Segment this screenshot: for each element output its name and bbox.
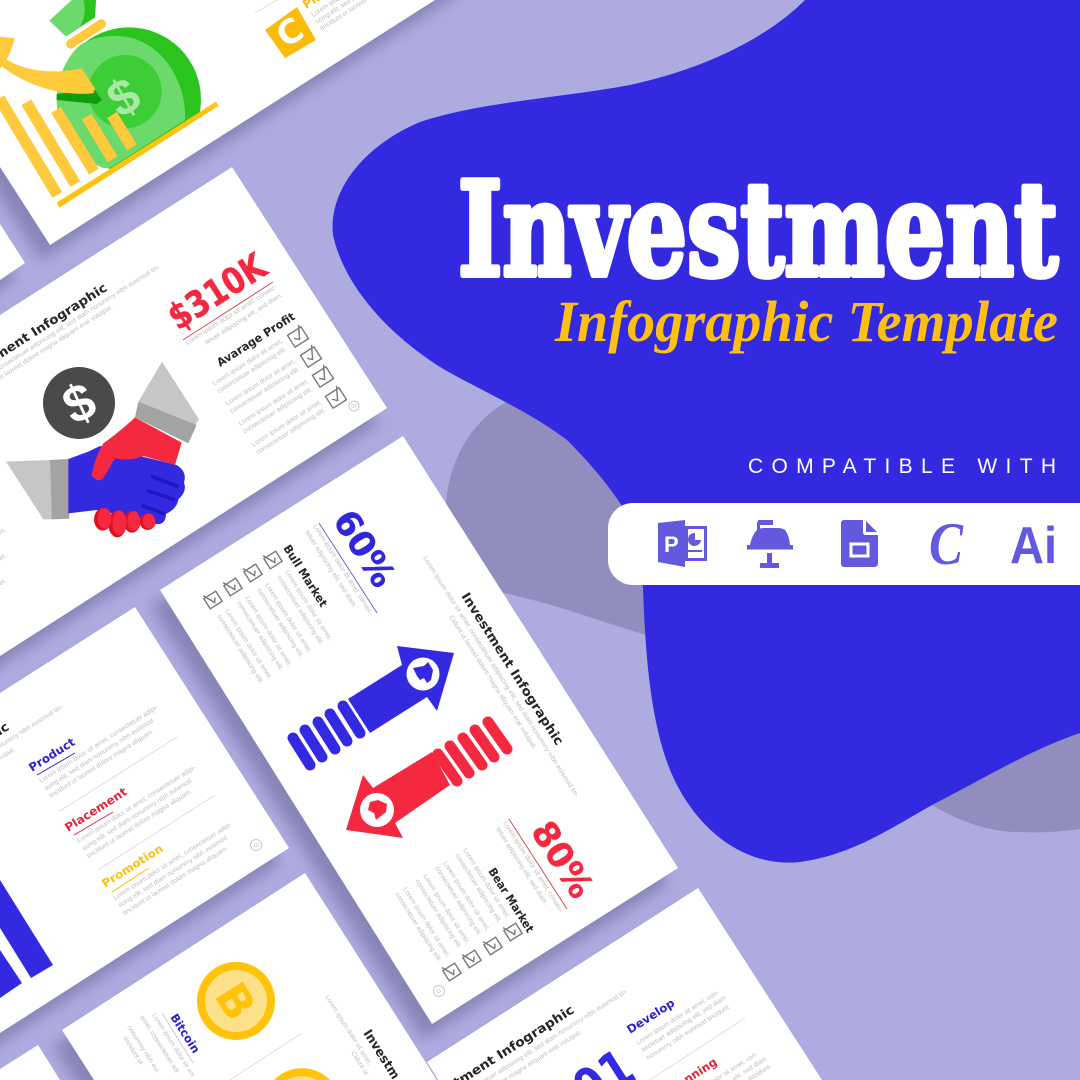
icon: C logo: C bbox=[269, 9, 311, 55]
checklist: bear: consectetuer adipiscing elit. bbox=[453, 852, 503, 925]
item: product: Product bbox=[26, 735, 78, 775]
blue blob bbox=[333, 0, 1080, 863]
arrow: bear down bbox=[346, 722, 507, 838]
panel: small bottom left slide bbox=[0, 1045, 60, 1080]
item: develop bbox=[624, 989, 732, 1062]
panel: small left slide bbox=[0, 224, 25, 280]
item: placement: Placement bbox=[62, 784, 130, 835]
text block: intro: Lorem ipsum dolor sit amet, bbox=[323, 994, 373, 1067]
panel: marketing mix slide bbox=[0, 607, 289, 1033]
text block: bitcoin copy bbox=[121, 1012, 196, 1079]
label: average profit: Avarage Profit bbox=[214, 309, 298, 370]
page number: 10 bbox=[253, 843, 259, 849]
item: placement: scing elit, sed diam nonummy nibh euismod bbox=[81, 777, 193, 852]
item: promotion: scing elit, sed diam nonummy nibh euismod bbox=[117, 834, 229, 909]
text block: intro: Lorem ipsum dolor sit amet, consectetuer adipiscing elit, sed diam nonummy nibh euismod tin- bbox=[421, 555, 580, 799]
chart bars bbox=[0, 880, 53, 998]
label: bitcoin: Bitcoin bbox=[167, 1011, 203, 1056]
checklist: Lorem ipsum dolor sit amet, bbox=[225, 358, 297, 407]
item: promotion: Promotion bbox=[99, 841, 166, 891]
text block: bull note: tetuer adipiscing elit, sed diam. bbox=[303, 529, 358, 610]
item: promotion: Lorem ipsum dolor sit amet, consectetuer adipi- bbox=[112, 821, 233, 902]
label: bull market: Bull Market bbox=[280, 542, 331, 610]
checklist: bear: consectetuer adipiscing elit. bbox=[433, 865, 483, 938]
item: develop: sectetuer adipiscing elit, sed diam bbox=[640, 994, 728, 1054]
item: product: tincidunt ut laoreet dolore magna aliquam. bbox=[48, 728, 155, 800]
text block: lower left copy bbox=[0, 528, 6, 586]
panel: average profit slide bbox=[0, 167, 387, 656]
checklist: bull: Lorem ipsum dolor sit amet, bbox=[263, 582, 313, 655]
darker background blob, lower right bbox=[932, 733, 1080, 832]
heading: Investment Infographic bbox=[458, 590, 567, 748]
icon: keynote bbox=[747, 520, 793, 568]
item: product: Lorem ipsum dolor sit amet, consectetuer adipi- bbox=[38, 704, 159, 785]
icon: canva: C bbox=[929, 511, 964, 577]
checklist: bull: consectetuer adipiscing elit. bbox=[275, 574, 325, 647]
checklist: bull: Lorem ipsum dolor sit amet, bbox=[223, 608, 273, 681]
checklist: bull: Lorem ipsum dolor sit amet, bbox=[283, 569, 333, 642]
checklist bbox=[212, 324, 347, 456]
text block: bull note: Lorem ipsum dolor sit amet, consec- bbox=[311, 523, 374, 617]
icon: illustrator: Ai bbox=[1010, 517, 1057, 575]
icon: dollar coin: $ bbox=[54, 371, 105, 436]
checklist: bear: consectetuer adipiscing elit. bbox=[413, 878, 463, 951]
text block: intro: Cidunt ut bbox=[349, 1050, 369, 1076]
checklist: consectetuer adipiscing elit. bbox=[255, 407, 327, 456]
checklist: bear: consectetuer adipiscing elit. bbox=[393, 891, 443, 964]
stat: 80%: 80% bbox=[522, 814, 601, 906]
text block: stat note: Lorem ipsum dolor sit amet, consec- bbox=[185, 284, 278, 347]
text block: bear note: Lorem ipsum dolor sit amet, consec- bbox=[501, 820, 564, 914]
icon: powerpoint: P bbox=[664, 532, 679, 557]
checklist: Lorem ipsum dolor sit amet, bbox=[238, 378, 310, 427]
icon: handshake bbox=[6, 362, 199, 537]
text: dollar glyph: $ bbox=[97, 66, 150, 128]
page number: 11 bbox=[434, 988, 442, 996]
icon: powerpoint bbox=[658, 520, 707, 567]
icon: second bitcoin coin bbox=[274, 1068, 330, 1080]
page number bbox=[349, 401, 359, 411]
text block: bitcoin copy: amet, consectetuer adi bbox=[138, 1014, 180, 1075]
text block: stat note: tetuer adipiscing elit, sed diam. bbox=[204, 292, 284, 346]
page number bbox=[434, 986, 444, 996]
text block: bitcoin copy: tincidunt ut bbox=[121, 1035, 144, 1066]
darker background blob, upper bbox=[446, 402, 646, 634]
icon: bitcoin coin: B bbox=[204, 974, 265, 1030]
stat: 60%: 60% bbox=[324, 503, 403, 595]
checklist: bear: Lorem ipsum dolor sit amet, bbox=[461, 847, 511, 920]
item: promotion: tincidunt ut laoreet dolore magna aliquam. bbox=[122, 845, 229, 917]
panel: bitcoin slide bbox=[62, 873, 437, 1080]
panel: develop slide bbox=[393, 888, 822, 1080]
checklist: consectetuer adipiscing elit. bbox=[229, 366, 301, 415]
item: develop: Develop bbox=[624, 996, 677, 1037]
panel: bull and bear slide bbox=[160, 436, 678, 1024]
text block: intro: Cidunt ut laoreet dolore magna aliquam erat volutpat. bbox=[447, 614, 538, 751]
text block: intro bbox=[484, 990, 627, 1080]
text block: bitcoin copy: Lorem ipsum dolor sit am bbox=[150, 1012, 196, 1079]
item: planning bbox=[681, 1051, 773, 1080]
text block: intro bbox=[0, 706, 62, 760]
checklist: Lorem ipsum dolor sit amet, bbox=[251, 399, 323, 448]
item: placement: Lorem ipsum dolor sit amet, consectetuer adipi- bbox=[76, 764, 197, 845]
checklist: bull: consectetuer adipiscing elit. bbox=[215, 613, 265, 686]
icon: google slides bbox=[841, 520, 878, 567]
checklist: bear bbox=[393, 847, 522, 981]
checklist: consectetuer adipiscing elit. bbox=[216, 346, 288, 395]
text: compatible with: COMPATIBLE WITH bbox=[748, 455, 1056, 478]
checklist: consectetuer adipiscing elit. bbox=[242, 386, 314, 435]
checklist: bull: Lorem ipsum dolor sit amet, bbox=[243, 595, 293, 668]
item: placement: tincidunt ut laoreet dolore magna aliquam. bbox=[86, 788, 193, 860]
checklist: bull: consectetuer adipiscing elit. bbox=[255, 587, 305, 660]
checklist: bear: Lorem ipsum dolor sit amet, bbox=[421, 873, 471, 946]
panel: compatibility pill bbox=[608, 503, 1080, 585]
arrow: bull up bbox=[293, 646, 454, 765]
checklist: bull: consectetuer adipiscing elit. bbox=[235, 600, 285, 673]
checklist: bear: Lorem ipsum dolor sit amet, bbox=[441, 860, 491, 933]
checklist: bull bbox=[202, 549, 333, 686]
item: product: scing elit, sed diam nonummy nibh euismod bbox=[43, 717, 155, 792]
icon: dollar coin bbox=[43, 367, 115, 439]
page number: 07 bbox=[351, 404, 357, 410]
checklist: Lorem ipsum dolor sit amet, bbox=[212, 338, 284, 387]
stat: 310K: $310K bbox=[161, 245, 275, 339]
subtitle: Infographic Template bbox=[554, 289, 1058, 354]
page number bbox=[250, 840, 262, 850]
text block: bitcoin copy: nonummy nibh eui bbox=[125, 1024, 160, 1074]
icon: money bag and growth bars bbox=[0, 0, 240, 210]
item: develop: Lorem ipsum dolor sit amet, con- bbox=[635, 989, 720, 1047]
text block: bear note: tetuer adipiscing elit, sed diam. bbox=[494, 826, 549, 907]
label: bear market: Bear Market bbox=[485, 865, 537, 935]
icon: bitcoin coin bbox=[197, 962, 275, 1040]
panel: money bag slide bbox=[0, 0, 435, 245]
item: develop: nonummy nibh euismod tincidunt. bbox=[645, 1003, 732, 1062]
checklist: bear: Lorem ipsum dolor sit amet, bbox=[401, 886, 451, 959]
